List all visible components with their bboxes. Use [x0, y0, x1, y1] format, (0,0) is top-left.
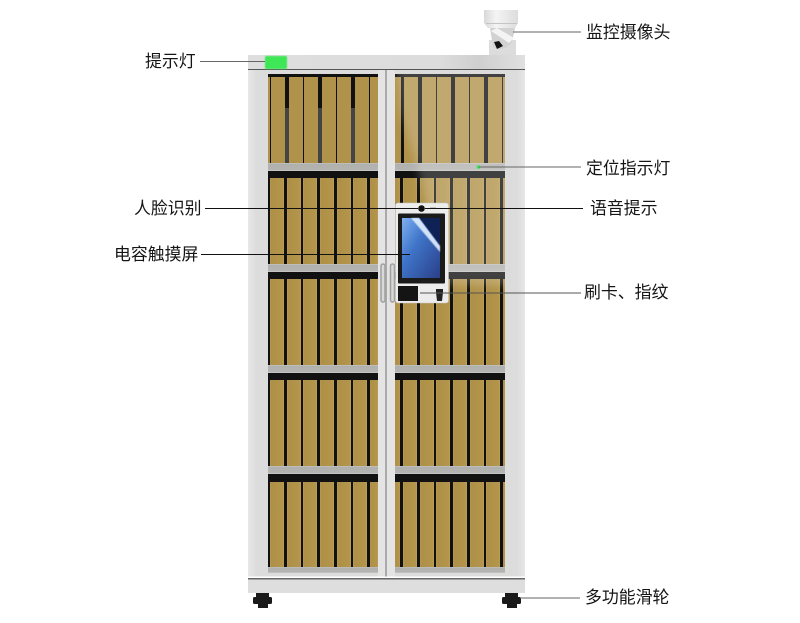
callout lines — [200, 32, 583, 598]
label: face recognition: 人脸识别 — [134, 199, 202, 218]
terminal camera — [418, 205, 425, 212]
left door interior — [268, 74, 378, 573]
row 1 folders, right — [395, 77, 505, 163]
cabinet body — [248, 55, 525, 593]
glass reflection — [395, 74, 505, 288]
caster left — [253, 593, 272, 608]
indicator lamp — [265, 56, 287, 69]
fingerprint scanner — [436, 289, 443, 301]
rows 2-5 folders, right — [395, 178, 505, 567]
terminal panel — [396, 203, 448, 303]
label: indicator lamp: 提示灯 — [145, 52, 196, 71]
touch screen — [398, 214, 445, 284]
label: multifunction casters: 多功能滑轮 — [585, 588, 670, 607]
location indicator light — [477, 165, 480, 169]
label: location indicator: 定位指示灯 — [586, 159, 671, 178]
shelves, left — [268, 163, 378, 573]
label: capacitive touch screen: 电容触摸屏 — [114, 245, 198, 264]
shelves, right — [395, 163, 505, 573]
rows 2-5 folders, left — [270, 178, 378, 567]
label: surveillance camera: 监控摄像头 — [586, 23, 670, 42]
row 1 folders, left — [268, 77, 378, 163]
label: voice prompt: 语音提示 — [590, 199, 658, 218]
security camera — [484, 10, 518, 56]
door handles — [381, 264, 394, 302]
right door interior — [395, 74, 505, 573]
caster right — [502, 593, 521, 608]
card reader — [398, 286, 418, 301]
label: card and fingerprint: 刷卡、指纹 — [584, 283, 669, 302]
